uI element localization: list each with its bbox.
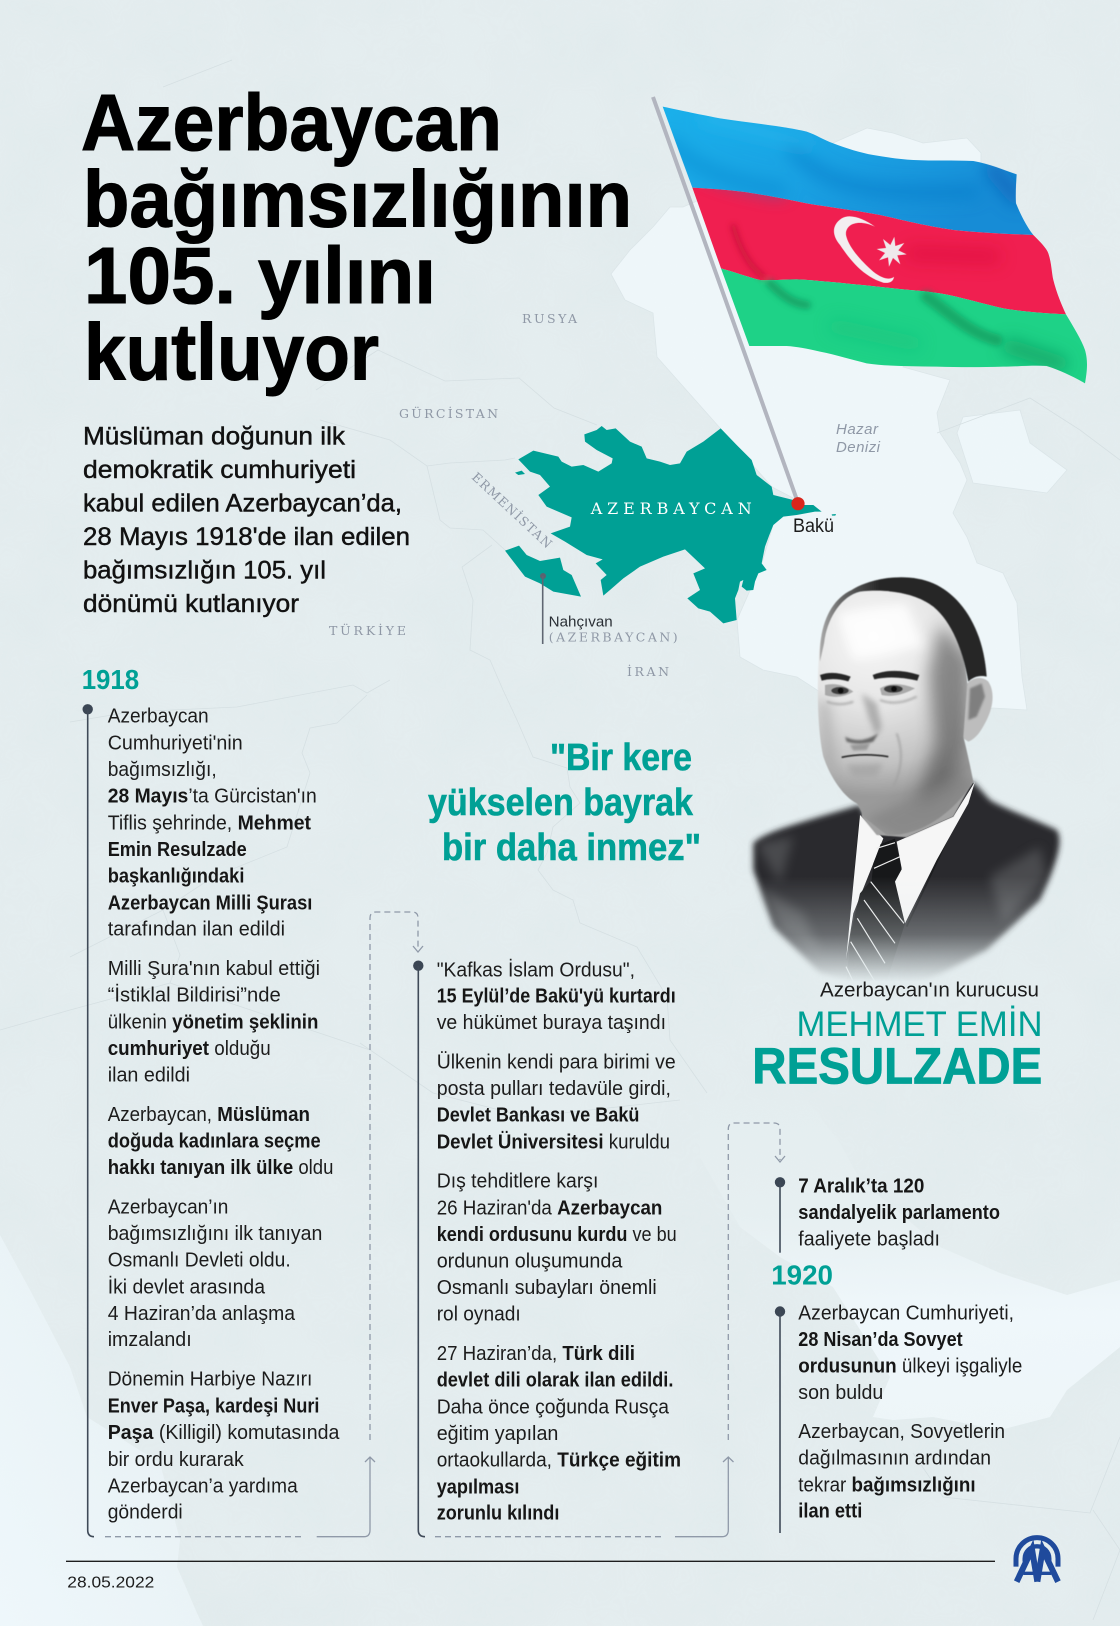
- text block 3: [108, 1104, 333, 1179]
- text block 2: posta pulları tedavüle girdi,: [437, 1078, 671, 1100]
- text block 1: faaliyete başladı: [798, 1228, 940, 1250]
- timeline line and dot: [413, 960, 785, 1537]
- text block 4: imzalandı: [108, 1329, 192, 1351]
- text block 3: Dış tehditlere karşı: [437, 1171, 598, 1193]
- year 1918: 1918: [82, 664, 139, 695]
- quote: [428, 737, 701, 869]
- map labels: Hazar: [836, 421, 879, 438]
- text block 1: başkanlığındaki: [108, 866, 244, 888]
- map labels: İRAN: [627, 664, 669, 679]
- text block 3: [437, 1171, 677, 1326]
- Baku marker: Bakü: [793, 516, 834, 537]
- subtitle: bağımsızlığın 105. yıl: [83, 557, 326, 585]
- timeline lines and dots: [775, 1177, 785, 1533]
- text block 2: son buldu: [798, 1382, 883, 1404]
- Baku marker: [791, 497, 834, 537]
- portrait suit: [753, 782, 1059, 990]
- text block 5: gönderdi: [108, 1501, 183, 1523]
- text block 1: Azerbaycan Milli Şurası: [108, 892, 312, 914]
- portrait features: [820, 671, 919, 787]
- text block 4: [108, 1196, 322, 1351]
- text block 1: "Kafkas İslam Ordusu",: [437, 959, 635, 982]
- portrait tie: [850, 838, 905, 952]
- text block 2: [437, 1051, 676, 1153]
- text block 1: [108, 706, 317, 941]
- portrait collar: [846, 815, 883, 960]
- text block 3: [798, 1421, 1005, 1522]
- flag crescent: [834, 216, 894, 283]
- quote: bir daha inmez": [442, 827, 701, 869]
- founder name: [752, 980, 1042, 1094]
- subtitle: 28 Mayıs 1918'de ilan edilen: [83, 523, 410, 551]
- text block 1: bağımsızlığı,: [108, 759, 217, 781]
- text block 5: [108, 1369, 340, 1523]
- text block 4: bağımsızlığını ilk tanıyan: [108, 1223, 322, 1245]
- text block 5: bir ordu kurarak: [108, 1449, 245, 1471]
- Nahcivan label: [540, 573, 678, 645]
- subtitle: dönümü kutlanıyor: [83, 590, 299, 618]
- text block 3: dağılmasının ardından: [798, 1448, 991, 1470]
- timeline column 3: [771, 1175, 1022, 1533]
- text block 1: Azerbaycan: [108, 706, 209, 728]
- text block 3: 26 Haziran'da Azerbaycan: [437, 1197, 662, 1219]
- portrait neck: [862, 757, 973, 837]
- subtitle: kabul edilen Azerbaycan’da,: [83, 490, 402, 518]
- text block 1: Emin Resulzade: [108, 839, 247, 861]
- text block 4: 27 Haziran’da, Türk dili: [437, 1343, 635, 1365]
- text block 4: zorunlu kılındı: [437, 1502, 559, 1524]
- portrait face: [818, 589, 977, 840]
- text block 5: Enver Paşa, kardeşi Nuri: [108, 1395, 319, 1417]
- text block 2: Milli Şura'nın kabul ettiği: [108, 958, 320, 980]
- text block 3: Azerbaycan, Sovyetlerin: [798, 1421, 1005, 1443]
- Nahcivan label: Nahçıvan: [549, 614, 613, 631]
- text block 2: “İstiklal Bildirisi”nde: [108, 984, 281, 1007]
- flag pole: [653, 97, 797, 500]
- text block 4: Azerbaycan’ın: [108, 1196, 228, 1218]
- map labels: TÜRKİYE: [329, 622, 406, 638]
- text block 3: Osmanlı subayları önemli: [437, 1277, 657, 1299]
- text block 2: ilan edildi: [108, 1065, 190, 1087]
- icon: AA logo: [1016, 1538, 1058, 1582]
- map labels: GÜRCİSTAN: [399, 405, 498, 421]
- title: Azerbaycan: [81, 78, 502, 167]
- map labels: RUSYA: [522, 311, 578, 326]
- timeline column 1: [82, 664, 423, 1537]
- text block 1: Cumhuriyeti'nin: [108, 732, 243, 754]
- text block 1: Tiflis şehrinde, Mehmet: [108, 812, 311, 834]
- map labels: ERMENİSTAN: [469, 469, 555, 551]
- text block 1: 28 Mayıs’ta Gürcistan'ın: [108, 786, 317, 808]
- text block 3: ordunun oluşumunda: [437, 1250, 623, 1272]
- quote: yükselen bayrak: [428, 782, 694, 824]
- text block 1: 7 Aralık’ta 120: [798, 1175, 924, 1197]
- text block 3: hakkı tanıyan ilk ülke oldu: [108, 1157, 333, 1179]
- text block 2: ordusunun ülkeyi işgaliyle: [798, 1356, 1022, 1378]
- text block 1: 15 Eylül’de Bakü'yü kurtardı: [437, 986, 676, 1008]
- text block 2: Devlet Bankası ve Bakü: [437, 1105, 639, 1127]
- text block 2: Ülkenin kendi para birimi ve: [437, 1051, 676, 1073]
- text block 2: Devlet Üniversitesi kuruldu: [437, 1130, 670, 1153]
- text block 1: [437, 959, 676, 1034]
- text block 1: ve hükümet buraya taşındı: [437, 1012, 666, 1034]
- timeline line and dot: [82, 704, 423, 1537]
- text block 3: Azerbaycan, Müslüman: [108, 1104, 310, 1126]
- map labels: Denizi: [836, 439, 881, 456]
- portrait ear: [961, 678, 993, 742]
- text block 3: kendi ordusunu kurdu ve bu: [437, 1224, 677, 1246]
- timeline column 2: [413, 959, 785, 1537]
- text block 4: devlet dili olarak ilan edildi.: [437, 1370, 673, 1392]
- text block 4: İki devlet arasında: [108, 1275, 266, 1298]
- subtitle: demokratik cumhuriyeti: [83, 456, 356, 484]
- portrait hair: [820, 577, 987, 682]
- text block 1: [798, 1175, 1000, 1250]
- portrait: Mehmet Emin Resulzade: [753, 577, 1059, 990]
- founder name: RESULZADE: [752, 1037, 1042, 1094]
- founder name: MEHMET EMİN: [796, 1005, 1042, 1044]
- text block 3: doğuda kadınlara seçme: [108, 1131, 321, 1153]
- text block 4: Osmanlı Devleti oldu.: [108, 1250, 291, 1272]
- footer rule: [66, 1560, 995, 1562]
- subtitle: Müslüman doğunun ilk: [83, 423, 346, 451]
- text block 2: 28 Nisan’da Sovyet: [798, 1329, 963, 1351]
- quote: "Bir kere: [550, 737, 692, 779]
- date: 28.05.2022: [67, 1574, 154, 1591]
- text block 2: Azerbaycan Cumhuriyeti,: [798, 1303, 1014, 1325]
- text block 3: rol oynadı: [437, 1304, 521, 1326]
- text block 5: Dönemin Harbiye Nazırı: [108, 1369, 312, 1391]
- text block 2: [798, 1303, 1022, 1404]
- Nahcivan label: (AZERBAYCAN): [549, 630, 678, 645]
- map: Azerbaycan: [505, 426, 836, 623]
- title: kutluyor: [84, 308, 379, 396]
- title: 105. yılını: [84, 231, 436, 320]
- text block 3: ilan etti: [798, 1500, 862, 1522]
- text block 4: ortaokullarda, Türkçe eğitim: [437, 1450, 681, 1472]
- text block 1: sandalyelik parlamento: [798, 1202, 1000, 1224]
- map labels: [329, 311, 881, 679]
- text block 4: Daha önce çoğunda Rusça: [437, 1396, 670, 1418]
- text block 4: 4 Haziran’da anlaşma: [108, 1303, 296, 1325]
- text block 4: [437, 1343, 681, 1524]
- text block 2: [108, 958, 320, 1087]
- text block 2: cumhuriyet olduğu: [108, 1038, 271, 1060]
- map label: Azerbaycan: AZERBAYCAN: [590, 499, 752, 518]
- subtitle: [83, 423, 410, 618]
- text block 3: tekrar bağımsızlığını: [798, 1474, 976, 1496]
- text block 1: tarafından ilan edildi: [108, 919, 285, 941]
- title: bağımsızlığının: [83, 154, 632, 244]
- founder name: Azerbaycan'ın kurucusu: [820, 980, 1039, 1002]
- flag star: [877, 237, 907, 267]
- text block 2: ülkenin yönetim şeklinin: [108, 1011, 318, 1033]
- flag: [663, 107, 1087, 383]
- text block 4: eğitim yapılan: [437, 1423, 558, 1445]
- text block 5: Paşa (Killigil) komutasında: [108, 1422, 340, 1444]
- year 1920: 1920: [771, 1259, 833, 1290]
- title: [81, 78, 632, 396]
- text block 4: yapılması: [437, 1476, 519, 1498]
- text block 5: Azerbaycan’a yardıma: [108, 1475, 299, 1497]
